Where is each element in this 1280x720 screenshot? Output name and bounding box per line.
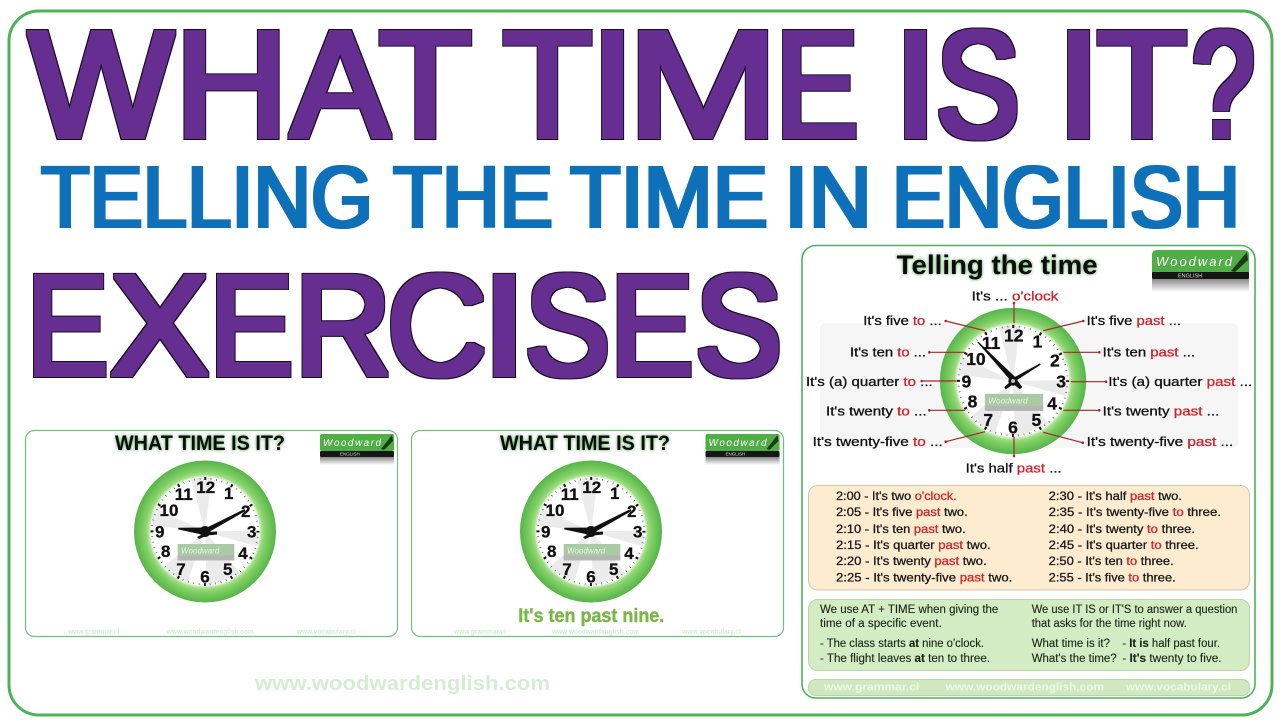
slide 2 footer urls: www.grammar.cl [453,629,506,636]
slide 2 clock: 2 [627,502,636,521]
slide 1 clock: 8 [161,542,170,561]
title: E [776,0,858,170]
panel: usage notes: - The class starts at nine o'clock. [820,638,984,650]
panel: usage notes: What's the time? [1032,653,1117,665]
title: M [627,0,779,170]
clock labels: It's (a) quarter to ... [806,374,933,389]
heading: exercises: E [210,245,293,406]
main clock: 5 [1032,410,1042,430]
clock labels: It's ... o'clock [972,289,1059,304]
slide 1 clock: 2 [241,502,250,521]
panel: time table: 2:40 - It's twenty to three. [1049,522,1195,536]
main clock: 11 [982,333,1001,353]
panel: time table: 2:05 - It's five past two. [836,505,968,519]
slide 2 clock: 9 [541,523,550,542]
clock labels: It's twenty-five to ... [813,434,943,449]
main clock: 4 [1047,394,1057,414]
title: H [174,0,288,170]
chart logo: Woodward [1156,254,1233,269]
panel: usage notes: - The flight leaves at ten to three. [820,653,990,665]
slide 2 clock: 6 [586,568,596,587]
heading: exercises: S [525,245,610,406]
website link: www.woodwardenglish.com [254,673,550,695]
slide 1 clock: Woodward [181,546,220,556]
slide 2 logo [706,434,780,465]
chart logo [1152,250,1249,292]
slide 2 clock [520,460,662,602]
slide 1 logo: ENGLISH [340,452,360,456]
title: I [893,0,938,170]
title: S [936,0,1019,170]
main clock: 9 [961,371,971,391]
slide 2 clock: 5 [609,560,618,579]
clock labels: It's twenty-five past ... [1087,434,1233,449]
main clock: Woodward [988,397,1028,406]
title: A [291,0,389,170]
panel: time table: 2:25 - It's twenty-five past two. [836,570,1012,584]
panel: usage notes: that asks for the time right now. [1032,618,1187,630]
panel: time table: 2:35 - It's twenty-five to three. [1049,505,1221,519]
slide 1 logo [320,434,394,465]
heading: exercises: E [610,245,693,406]
panel: time table: 2:55 - It's five to three. [1049,570,1176,584]
chart heading: Telling the time [897,250,1098,280]
title: W [29,0,173,170]
heading: exercises: C [387,245,486,406]
slide 2 clock: 3 [633,523,642,542]
panel: time table: 2:30 - It's half past two. [1049,489,1182,503]
panel: exercise slide 2 [412,430,784,636]
title: I [1056,0,1101,170]
slide 1 clock: 5 [223,560,232,579]
title: ? [1192,0,1254,170]
slide 1 footer urls: www.grammar.cl [67,629,119,636]
main clock: 8 [968,391,978,411]
slide 1 footer urls: www.vocabulary.cl [296,629,356,636]
panel: telling the time chart [802,246,1255,698]
title: T [379,0,469,170]
chart footer urls: www.woodwardenglish.com [945,682,1104,694]
panel: usage notes: We use IT IS or IT'S to answer a question [1032,604,1237,616]
panel: usage notes: We use AT + TIME when giving the [820,604,998,616]
slide 2 footer urls: www.vocabulary.cl [681,629,741,636]
slide 1 clock: 12 [196,478,215,497]
title: I [590,0,635,170]
subtitle: ENGLISH [892,149,1240,246]
main clock: 10 [966,349,986,369]
clock labels: It's ten past ... [1103,345,1195,360]
panel: time table: 2:50 - It's ten to three. [1049,554,1174,568]
main clock: 2 [1050,350,1060,370]
heading: exercises: E [27,245,108,406]
slide 1 clock [134,460,276,602]
slide 2 footer urls: www.woodwardenglish.com [551,629,639,636]
clock labels: It's half past ... [966,460,1062,475]
panel: time table: 2:10 - It's ten past two. [836,522,966,536]
main clock: 6 [1008,418,1018,438]
panel: usage notes [808,600,1250,670]
panel: usage notes: - It's twenty to five. [1122,653,1222,665]
panel: usage notes: - It is half past four. [1122,638,1220,650]
slide 1 clock: 4 [238,544,248,563]
pointer lines [922,303,1106,456]
panel: time table: 2:20 - It's twenty past two. [836,554,987,568]
slide 2 clock: 11 [561,485,579,504]
slide 2 answer: It's ten past nine. [518,605,664,627]
slide 1 clock: 9 [155,523,164,542]
heading: exercises: X [111,245,209,406]
heading: exercises: I [481,245,527,406]
slide 1 footer urls [67,629,356,636]
panel: time table: 2:45 - It's quarter to three. [1049,538,1199,552]
slide 1 clock: 10 [160,501,178,520]
slide 2 clock: 1 [610,484,619,503]
slide 2 clock: 12 [582,478,601,497]
clock labels: It's five to ... [863,313,942,328]
panel: exercise slide 1 [26,430,398,636]
chart logo: ENGLISH [1178,274,1202,280]
slide 1 clock: 7 [176,560,186,579]
panel: usage notes: What time is it? [1032,638,1110,650]
slide 2 heading: WHAT TIME IS IT? [500,431,670,455]
slide 1 heading: WHAT TIME IS IT? [115,431,285,455]
chart footer urls [808,680,1250,696]
slide 2 clock: 10 [546,501,564,520]
panel: usage notes: time of a specific event. [820,618,942,630]
chart footer urls: www.grammar.cl [823,682,919,694]
slide 2 clock: 4 [624,544,634,563]
clock labels: It's twenty past ... [1103,403,1219,418]
watermark [820,323,1238,448]
panel: time table: 2:00 - It's two o'clock. [836,489,957,503]
slide 1 clock: 6 [200,568,210,587]
panel: time table [808,486,1250,590]
main clock [940,308,1086,454]
slide 2 clock: 8 [547,542,556,561]
slide 1 clock: 3 [247,523,256,542]
clock labels: It's ten to ... [850,345,926,360]
subtitle: THE [393,149,553,246]
clock labels [806,289,1252,475]
chart footer urls: www.vocabulary.cl [1125,682,1231,694]
subtitle: TIME [570,149,768,246]
clock labels: It's twenty to ... [826,403,927,418]
heading: exercises: S [696,245,782,406]
slide 2 clock: 7 [562,560,572,579]
slide 2 logo: ENGLISH [726,452,745,456]
title: T [503,0,592,170]
clock labels: It's (a) quarter past ... [1108,374,1252,389]
slide 2 logo: Woodward [708,438,767,449]
subtitle: IN [784,149,872,246]
slide 1 logo: Woodward [323,438,381,449]
subtitle: TELLING [41,149,373,246]
slide 1 footer urls: www.woodwardenglish.com [166,629,254,636]
clock labels: It's five past ... [1087,313,1181,328]
heading: exercises: R [295,245,391,406]
main clock: 3 [1056,371,1066,391]
main clock: 12 [1004,326,1024,346]
slide 2 footer urls [453,629,741,636]
panel: time table: 2:15 - It's quarter past two. [836,538,991,552]
main clock: 1 [1033,332,1043,352]
main clock: 7 [983,410,993,430]
slide 1 clock: 11 [175,485,193,504]
title: T [1097,0,1187,170]
slide 2 clock: Woodward [567,546,606,556]
slide 1 clock: 1 [224,484,233,503]
